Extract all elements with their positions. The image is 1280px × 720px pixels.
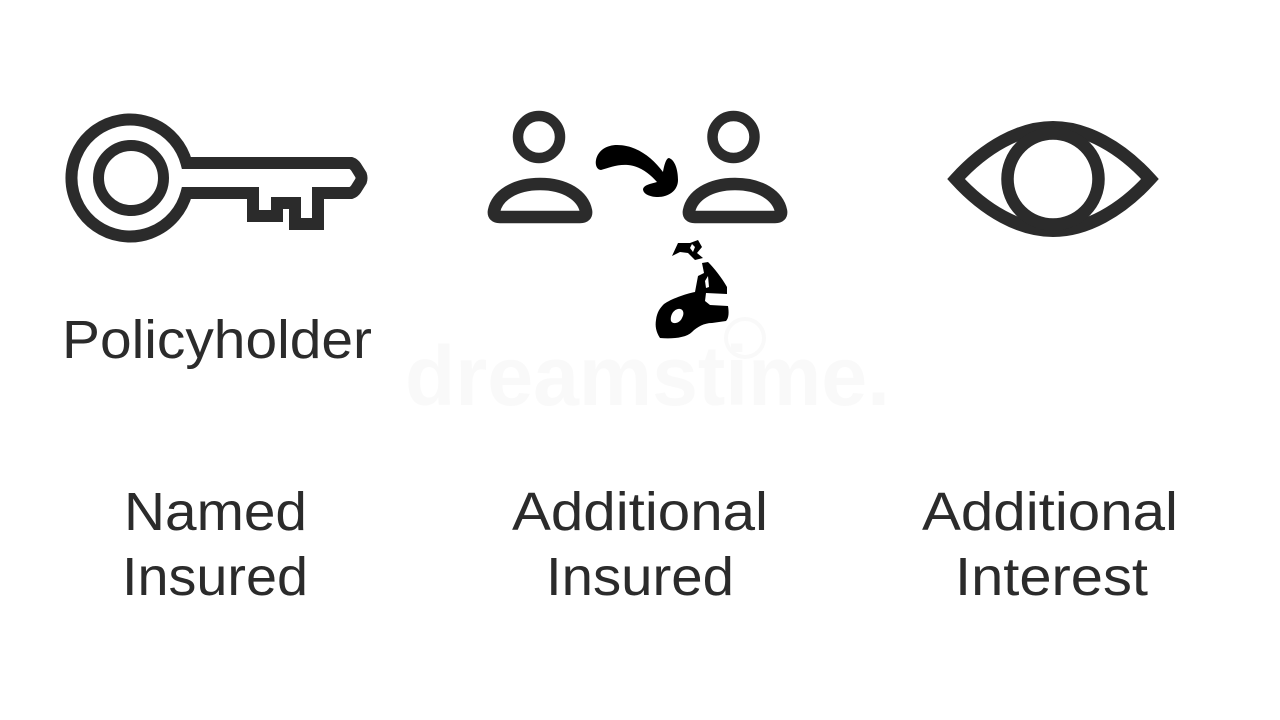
icon: person left bbox=[494, 116, 586, 217]
label: Named Insured: Named bbox=[124, 482, 307, 542]
icon: person right bbox=[689, 116, 781, 217]
label: Additional Insured bbox=[512, 482, 768, 607]
icon: black artifact blob bbox=[656, 240, 729, 338]
label: Additional Insured: Additional bbox=[512, 482, 768, 542]
icon: eye bbox=[956, 128, 1150, 230]
label: Additional Interest: Interest bbox=[955, 547, 1148, 607]
label: Additional Interest bbox=[922, 482, 1178, 607]
arrow: transfer between people bbox=[596, 145, 678, 197]
label: Policyholder: Policyholder bbox=[62, 310, 372, 370]
watermark: dreamstime: dreamstime. bbox=[405, 329, 890, 423]
label: Additional Insured: Insured bbox=[546, 547, 734, 607]
label: Additional Interest: Additional bbox=[922, 482, 1178, 542]
label: Named Insured bbox=[122, 482, 308, 607]
icon: key bbox=[71, 120, 361, 237]
label: Named Insured: Insured bbox=[122, 547, 308, 607]
